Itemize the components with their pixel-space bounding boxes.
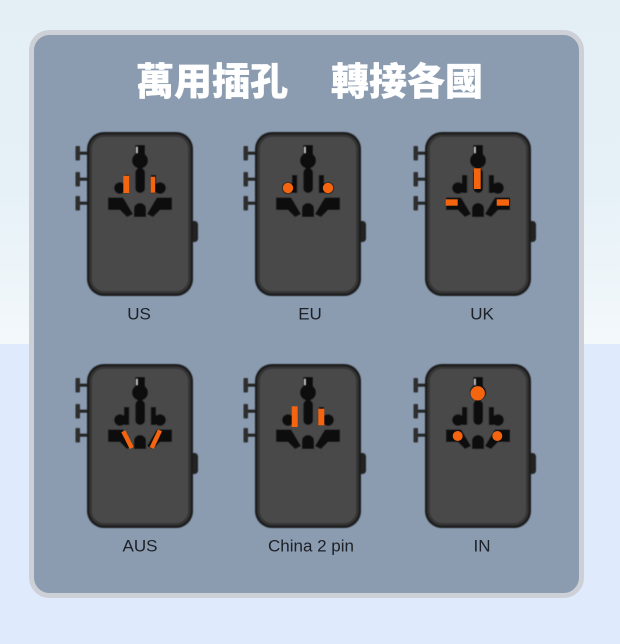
panel: plug types [32,32,582,596]
label: IN: IN [474,536,490,556]
label: AUS: AUS [123,536,157,556]
adapter: US [76,132,198,296]
label: UK: UK [470,304,494,324]
label: EU: EU [298,304,322,324]
adapter: EU [244,132,366,296]
title: 轉接各國 [331,62,483,104]
label: China 2 pin: China 2 pin [268,536,354,556]
title: 萬用插孔 [136,62,288,104]
label: US: US [127,304,151,324]
adapter: AUS [76,364,198,528]
title [136,62,483,104]
adapter: China 2 pin [244,364,366,528]
adapter: UK [414,132,536,296]
adapter: IN [414,364,536,528]
